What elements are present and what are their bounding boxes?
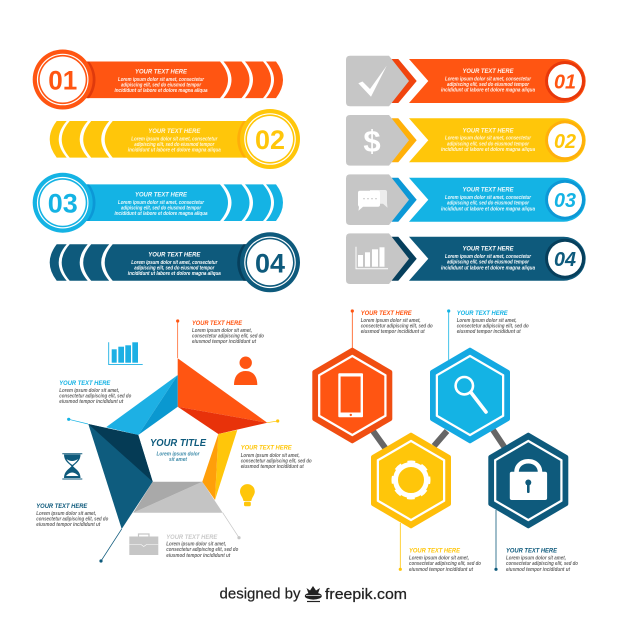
leader lines and dots (67, 319, 279, 563)
text block: yellow (241, 445, 312, 470)
text block: orange: eiusmod tempor incididunt ut (192, 339, 256, 345)
icon: freepik crown (305, 586, 322, 602)
icon: smartphone (338, 373, 363, 417)
grey tag with dollar icon: $ (363, 123, 381, 158)
text block right 03: adipiscing elit, sed do eiusmod tempor (447, 201, 530, 207)
number badge right 01 (545, 61, 585, 101)
number badge right 04: 04 (554, 249, 576, 271)
text block: hex blue: Lorem ipsum dolor sit amet, (457, 318, 517, 324)
text block: hex navy (506, 548, 578, 573)
text block: hex yellow: eiusmod tempor incididunt ut (409, 567, 473, 573)
ribbon bar 01 (86, 62, 283, 98)
text block 03: incididunt ut labore et dolore magna aliqua (114, 211, 208, 217)
text block 01: incididunt ut labore et dolore magna aliqua (114, 88, 208, 94)
number badge 02 (240, 109, 300, 169)
number badge 01 (33, 50, 93, 110)
text block right 01: adipiscing elit, sed do eiusmod tempor (447, 82, 530, 88)
text block: navy: Lorem ipsum dolor sit amet, (36, 511, 96, 517)
segment: grey (133, 482, 223, 513)
number badge right 03 (545, 180, 585, 220)
text block: yellow: eiusmod tempor incididunt ut (241, 464, 304, 470)
icon: briefcase (129, 534, 158, 555)
text block 02: YOUR TEXT HERE (148, 128, 201, 135)
number badge 02: 02 (255, 125, 285, 155)
text block: yellow: consectetur adipiscing elit, sed do (241, 458, 312, 464)
text block: navy (36, 503, 108, 528)
banner: left 01 (33, 50, 283, 110)
text block: hex yellow: consectetur adipiscing elit, sed do (409, 561, 481, 567)
grey tag with chat icon (346, 174, 409, 225)
text block: blue: eiusmod tempor incididunt ut (59, 399, 124, 405)
number badge right 04 (545, 239, 585, 279)
icon: person (234, 356, 257, 385)
text block right 03: YOUR TEXT HERE (462, 187, 514, 194)
text block right 04: adipiscing elit, sed do eiusmod tempor (447, 260, 530, 266)
chevron and arrow bar 03 (392, 178, 586, 222)
centre title: Lorem ipsum dolor (156, 451, 201, 457)
text block 04 (128, 251, 221, 277)
hexagon: magnifier (432, 350, 508, 441)
text block right 02: YOUR TEXT HERE (462, 127, 514, 134)
ribbon bar 02 (50, 121, 247, 158)
number badge right 03: 03 (554, 190, 576, 212)
number badge right 01: 01 (554, 72, 576, 94)
text block 02: incididunt ut labore et dolore magna aliqua (128, 148, 221, 154)
centre title (150, 437, 207, 463)
number badge 03: 03 (48, 189, 78, 219)
text block: hex blue (457, 310, 529, 335)
text block 03: YOUR TEXT HERE (135, 192, 188, 199)
panel: pentagon diagram (36, 319, 312, 563)
number badge 03 (33, 173, 93, 233)
text block right 01 (441, 68, 535, 94)
text block 02: Lorem ipsum dolor sit amet, consectetur (131, 136, 218, 142)
banner: left 03 (33, 173, 283, 233)
text block: hex orange: Lorem ipsum dolor sit amet, (361, 318, 421, 324)
grey tag with check icon (346, 56, 409, 106)
text block: orange: consectetur adipiscing elit, sed do (192, 334, 264, 340)
number badge right 02: 02 (554, 131, 576, 153)
text block right 04 (441, 246, 535, 271)
text block 02 (128, 128, 221, 154)
text block right 03: Lorem ipsum dolor sit amet, consectetur (445, 195, 532, 201)
text block: hex orange: YOUR TEXT HERE (361, 310, 412, 317)
ribbon bar 04 (50, 244, 246, 281)
text block: blue (59, 380, 131, 405)
chevron and arrow bar 01 (392, 59, 586, 103)
text block: navy: consectetur adipiscing elit, sed do (36, 516, 108, 522)
chevron and arrow bar 04 (392, 237, 586, 281)
text block: hex navy: YOUR TEXT HERE (506, 548, 558, 555)
grey tag with dollar icon (346, 115, 409, 166)
text block 03 (114, 192, 208, 217)
text block: yellow: Lorem ipsum dolor sit amet, (241, 453, 300, 459)
text block: hex navy: eiusmod tempor incididunt ut (506, 567, 570, 573)
text block right 03 (441, 187, 535, 212)
icon: gear (393, 462, 429, 498)
text block 03: adipiscing elit, sed do eiusmod tempor (121, 206, 202, 212)
text block: hex blue: YOUR TEXT HERE (457, 310, 508, 317)
footer credit (220, 586, 407, 603)
centre title: sit amet (169, 457, 187, 463)
icon: hourglass (62, 454, 82, 479)
number badge right 02 (545, 120, 585, 160)
text block: navy: eiusmod tempor incididunt ut (36, 522, 101, 528)
number badge 01: 01 (48, 66, 77, 96)
chevron and arrow bar 02 (392, 118, 586, 162)
icon: bar chart (109, 342, 143, 365)
number badge 04 (240, 232, 300, 292)
text block right 02: incididunt ut labore et dolore magna aliqua (441, 147, 535, 153)
text block: grey: consectetur adipiscing elit, sed do (166, 547, 238, 553)
text block right 01: incididunt ut labore et dolore magna aliqua (441, 88, 535, 94)
text block 02: adipiscing elit, sed do eiusmod tempor (134, 142, 215, 148)
freepik wordmark: freepik.com (325, 586, 407, 603)
text block 04: adipiscing elit, sed do eiusmod tempor (134, 265, 215, 271)
text block: hex orange: consectetur adipiscing elit, sed do (361, 324, 433, 330)
text block right 01: Lorem ipsum dolor sit amet, consectetur (445, 76, 532, 82)
footer credit: designed by (220, 586, 301, 602)
segment: navy (88, 424, 153, 529)
text block 01: YOUR TEXT HERE (135, 68, 188, 76)
text block: orange (192, 320, 264, 345)
icon: light bulb (240, 484, 255, 506)
text block right 02: Lorem ipsum dolor sit amet, consectetur (445, 136, 532, 142)
banner: left 04 (50, 232, 300, 292)
text block: hex navy: consectetur adipiscing elit, sed do (506, 561, 578, 567)
text block 01: adipiscing elit, sed do eiusmod tempor (121, 82, 202, 88)
banner: right 04 (346, 233, 586, 284)
icon: padlock (510, 459, 547, 500)
text block right 04: YOUR TEXT HERE (462, 246, 514, 253)
banner: right 02 (346, 115, 586, 166)
text block: yellow: YOUR TEXT HERE (241, 445, 292, 452)
text block: blue: YOUR TEXT HERE (59, 380, 111, 387)
text block: blue: consectetur adipiscing elit, sed do (59, 393, 131, 399)
segment: blue (106, 375, 178, 435)
text block: hex orange: eiusmod tempor incididunt ut (361, 329, 425, 335)
banner: left 02 (50, 109, 300, 169)
text block: grey: eiusmod tempor incididunt ut (166, 553, 231, 559)
text block right 02 (441, 127, 535, 153)
segment: yellow (202, 430, 237, 500)
text block 03: Lorem ipsum dolor sit amet, consectetur (118, 200, 205, 206)
centre title: YOUR TITLE (150, 437, 207, 449)
text block 01 (114, 68, 208, 94)
text block: navy: YOUR TEXT HERE (36, 503, 88, 510)
hexagon: gear (373, 435, 449, 526)
text block right 02: adipiscing elit, sed do eiusmod tempor (447, 141, 530, 147)
ribbon bar 03 (86, 184, 283, 221)
number badge 04: 04 (255, 248, 285, 278)
text block: orange: Lorem ipsum dolor sit amet, (192, 328, 252, 334)
text block right 03: incididunt ut labore et dolore magna aliqua (441, 206, 535, 212)
leader lines and dots (351, 309, 498, 571)
text block: hex orange (361, 310, 433, 335)
text block right 04: incididunt ut labore et dolore magna aliqua (441, 265, 535, 271)
text block: hex navy: Lorem ipsum dolor sit amet, (506, 556, 566, 562)
segment: orange (178, 358, 267, 434)
text block 04: incididunt ut labore et dolore magna aliqua (128, 271, 221, 277)
hexagon: lock (490, 435, 566, 526)
text block: hex blue: eiusmod tempor incididunt ut (457, 329, 521, 335)
text block: hex yellow: YOUR TEXT HERE (409, 548, 461, 555)
text block: grey: YOUR TEXT HERE (166, 534, 218, 541)
text block 04: YOUR TEXT HERE (148, 251, 201, 258)
text block right 01: YOUR TEXT HERE (462, 68, 514, 75)
text block right 04: Lorem ipsum dolor sit amet, consectetur (445, 254, 532, 260)
text block: grey (166, 534, 238, 559)
text block 04: Lorem ipsum dolor sit amet, consectetur (131, 260, 218, 266)
text block 01: Lorem ipsum dolor sit amet, consectetur (118, 77, 205, 83)
panel: hexagon diagram (314, 309, 578, 573)
text block: hex yellow: Lorem ipsum dolor sit amet, (409, 556, 469, 562)
text block: hex blue: consectetur adipiscing elit, sed do (457, 324, 529, 330)
text block: orange: YOUR TEXT HERE (192, 320, 243, 327)
banner: right 03 (346, 174, 586, 225)
grey tag with chart icon (346, 233, 409, 284)
connector bars (373, 430, 505, 449)
text block: blue: Lorem ipsum dolor sit amet, (59, 388, 119, 394)
hexagon: phone (314, 350, 390, 441)
icon: magnifying glass (456, 377, 486, 412)
text block: grey: Lorem ipsum dolor sit amet, (166, 542, 226, 548)
text block: hex yellow (409, 548, 481, 573)
banner: right 01 (346, 56, 586, 106)
